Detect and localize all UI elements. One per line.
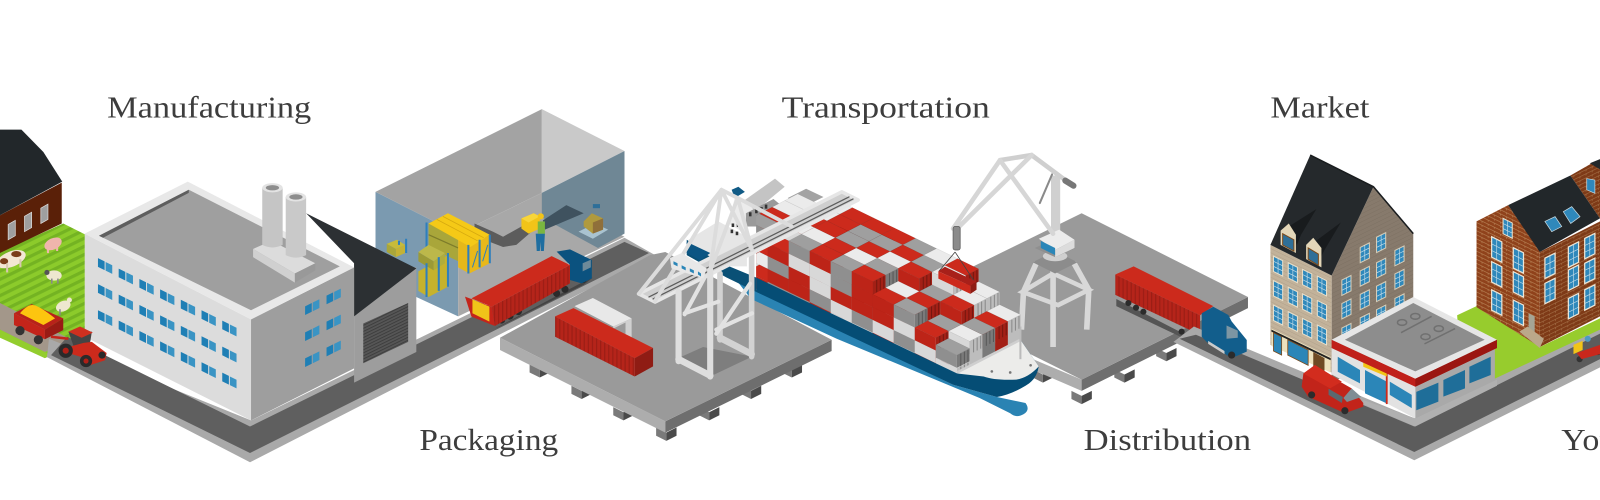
left face: [85, 234, 251, 420]
factory building: [85, 182, 416, 420]
barn wall: [0, 183, 62, 253]
right glass wall: [542, 151, 624, 248]
sheep: [44, 270, 62, 284]
right windows: [1545, 233, 1595, 319]
platform feet: [1033, 348, 1177, 404]
port platform right: [913, 213, 1248, 404]
shop front: [1271, 329, 1331, 376]
container ship: [687, 179, 1039, 416]
roof rim: [85, 182, 354, 319]
shop right wall: [1415, 347, 1495, 418]
roof: [1345, 303, 1485, 371]
barn windows: [8, 204, 48, 240]
truck cab: [1202, 307, 1247, 359]
door: [1529, 313, 1535, 336]
stack column -1: [756, 194, 816, 289]
platform top: [500, 252, 832, 421]
dormer 2: [1306, 222, 1341, 267]
left glass wall: [376, 192, 458, 316]
undercarriage: [495, 278, 593, 329]
chimney 2: [286, 192, 306, 258]
right wall: [1540, 221, 1600, 347]
stack column 0: [768, 206, 852, 298]
scooter: [1573, 336, 1600, 362]
roof vents: [1397, 313, 1455, 344]
skylights: [1545, 179, 1595, 232]
hull stripe: [727, 267, 1028, 416]
left windows: [1492, 237, 1523, 326]
wagon: [14, 304, 68, 344]
tractor: [59, 327, 107, 367]
crane deck: [1035, 239, 1076, 257]
red fascia: [1332, 340, 1497, 387]
rear gable: [1570, 163, 1600, 218]
trailer side: [492, 265, 570, 326]
chimney 1: [262, 183, 283, 247]
annex wall: [354, 263, 416, 383]
stack column 6: [894, 259, 979, 366]
crane hook and hanging container: [938, 227, 977, 294]
small rack: [418, 245, 448, 297]
port platform left: [500, 252, 832, 441]
right windows: [1416, 357, 1491, 410]
trailer shadow: [1116, 299, 1187, 340]
truck at packaging: [465, 249, 593, 329]
boom: [639, 192, 858, 302]
label: Manufacturing: Manufacturing: [107, 90, 311, 124]
pig: [42, 235, 64, 253]
windows left: [1273, 256, 1327, 345]
gantry braces: [685, 277, 752, 334]
crane turret: [1039, 230, 1074, 257]
annex shutter door: [363, 303, 408, 363]
platform sides: [980, 337, 1082, 391]
right top wall: [542, 109, 624, 193]
conveyor belt: [474, 223, 532, 247]
rack of boxes: [427, 213, 490, 273]
left wall: [1270, 245, 1332, 372]
red van: [1302, 365, 1363, 414]
corner shop: [1332, 297, 1497, 427]
back wall: [376, 109, 542, 234]
roof: [1270, 155, 1373, 276]
label: Transportation: Transportation: [782, 90, 990, 124]
factory windows left: [98, 258, 237, 388]
bow deck: [957, 340, 1039, 380]
stack column 7: [914, 282, 1000, 364]
label: Packaging: Packaging: [419, 423, 558, 457]
grass by the house: [1457, 306, 1600, 379]
trailer top: [471, 256, 570, 307]
delivery truck: [1115, 266, 1213, 340]
platform top: [913, 213, 1248, 380]
field: [0, 223, 86, 358]
stack column 8: [936, 305, 1021, 381]
yellow sign: [1363, 362, 1387, 377]
bow detail: [991, 327, 1032, 374]
bow rail: [957, 340, 1020, 372]
shop base: [1363, 380, 1497, 427]
sheep 2: [54, 297, 72, 315]
stack column 5: [873, 248, 958, 356]
cables: [939, 252, 974, 282]
trailer top: [1115, 266, 1213, 315]
scale with parcel: [579, 204, 608, 239]
tall market building: [1270, 155, 1413, 383]
stack column 4: [852, 238, 937, 345]
factory windows right: [305, 289, 341, 367]
stern hull: [687, 240, 756, 292]
conveyor shadow: [543, 205, 584, 230]
crane legs: [1021, 262, 1089, 347]
farm: barn, field and animals: [0, 130, 86, 358]
trailer yellow doors: [472, 299, 489, 322]
left road with kerb: [47, 238, 655, 462]
left wall: [1477, 205, 1540, 347]
platform side left: [500, 338, 665, 433]
red container: [555, 308, 653, 377]
gantry cab: [670, 253, 707, 278]
cow: [0, 246, 28, 272]
farm path: [0, 303, 71, 352]
barn roof: [0, 130, 62, 215]
stack column 1: [789, 208, 873, 315]
white container: [574, 298, 632, 339]
floor: [458, 193, 624, 316]
crane shadow: [682, 347, 752, 377]
crane ring: [1033, 251, 1078, 273]
trailer end: [465, 297, 495, 326]
grass verge: [0, 330, 51, 358]
jib: [953, 155, 1073, 234]
hook: [953, 227, 960, 250]
trailer side: [1115, 274, 1200, 335]
left windows: [1338, 357, 1412, 408]
right face: [251, 267, 354, 420]
hull: [756, 278, 1039, 397]
roof: [1508, 176, 1600, 252]
hanging container: [938, 267, 977, 294]
right wall: [1332, 187, 1413, 383]
harbour crane: [953, 155, 1089, 347]
roof: [99, 190, 340, 310]
wheels: [498, 276, 587, 324]
stoop: [1519, 327, 1544, 348]
rear legs: [720, 250, 752, 357]
gable window: [1503, 218, 1512, 238]
truck cab: [557, 249, 592, 283]
infographic: supply chain isometric scene: [0, 96, 1600, 462]
label: Distribution: Distribution: [1084, 423, 1251, 457]
single box stand: [387, 239, 406, 257]
superstructure: [687, 179, 823, 266]
chimney base: [253, 241, 315, 283]
windows right: [1342, 233, 1404, 343]
worker carrying box: [521, 213, 545, 251]
truck wheels: [1125, 300, 1193, 338]
gantry crane: [639, 190, 858, 377]
brick apartment house: [1477, 159, 1600, 348]
label: Market: Market: [1270, 90, 1370, 124]
front legs: [679, 270, 710, 377]
wagon and tractor: [14, 304, 107, 367]
platform feet: [530, 364, 802, 441]
stack column 3: [831, 228, 916, 335]
container stacks: [747, 194, 1021, 381]
right road with kerb: [1173, 324, 1600, 460]
roof rim: [1332, 297, 1497, 379]
packaging building: [376, 109, 624, 316]
shop left wall: [1332, 348, 1415, 418]
annex roof: [306, 213, 416, 316]
crane mast: [1051, 176, 1060, 237]
platform side right: [665, 340, 832, 433]
cab window: [583, 260, 591, 271]
gantry frame: [639, 190, 792, 301]
stack column 2: [810, 218, 894, 325]
dormer 1: [1281, 209, 1316, 253]
